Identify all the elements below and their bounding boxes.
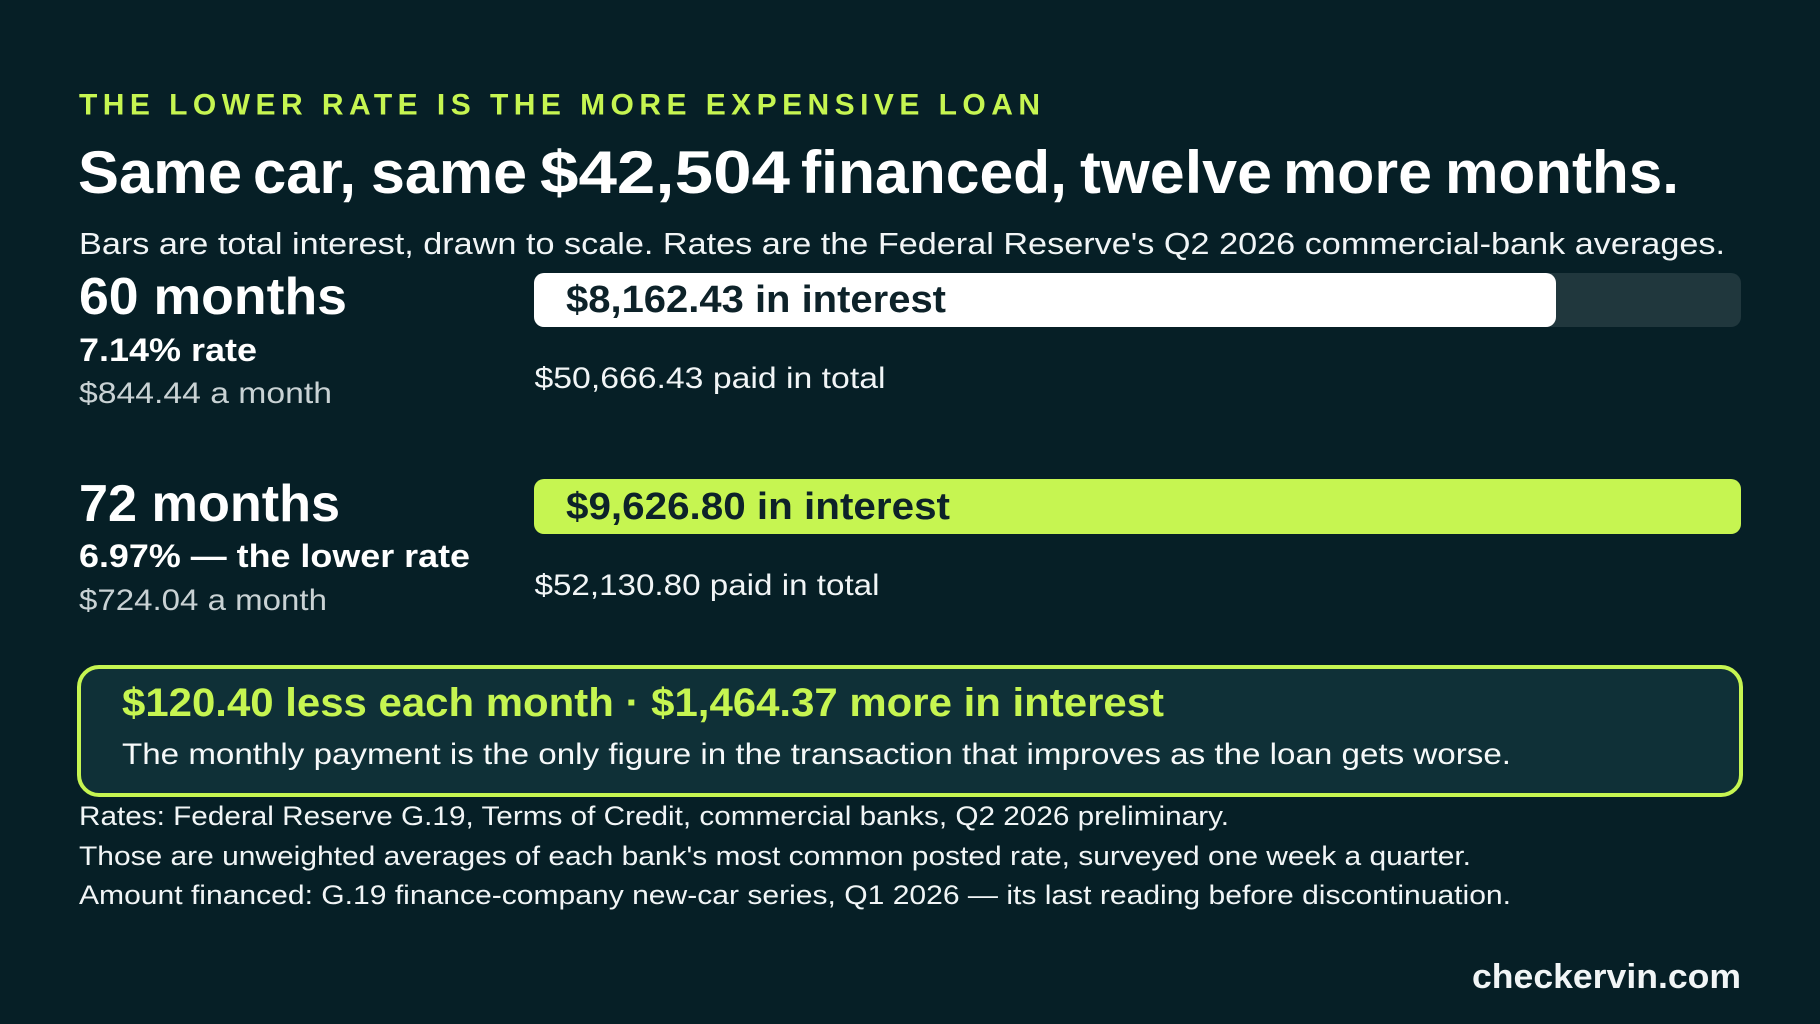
source note: amount financed: Amount financed: G.19 finance-company new-car series, Q1 2026 — its last reading before discontinuation.	[79, 880, 1511, 910]
title: same	[371, 139, 527, 206]
total paid: $50,666.43: $50,666.43 paid in total	[534, 362, 886, 395]
title	[78, 139, 1679, 206]
bar: 72 month interest	[534, 479, 1741, 534]
title: $42,504	[540, 139, 791, 206]
footnotes	[79, 801, 1511, 910]
title: more	[1283, 139, 1432, 206]
title: car,	[253, 139, 356, 206]
panel: 72 month loan row	[79, 475, 1741, 617]
callout body: The monthly payment is the only figure in the transaction that improves as the loan gets worse.	[122, 738, 1511, 771]
monthly payment: $724.04: $724.04 a month	[79, 584, 327, 617]
subtitle: Bars are total interest, drawn to scale. Rates are the Federal Reserve's Q2 2026 commercial-bank averages.	[79, 226, 1725, 261]
bar value: $9,626.80 in interest: $9,626.80 in interest	[566, 486, 950, 528]
term label: 72 months: 72 months	[79, 475, 340, 533]
term label: 60 months: 60 months	[79, 268, 347, 326]
panel: 60 month loan row	[79, 268, 1741, 410]
source note: rates: Rates: Federal Reserve G.19, Terms of Credit, commercial banks, Q2 2026 preliminary.	[79, 801, 1229, 831]
rate: 6.97%: 6.97% — the lower rate	[79, 538, 470, 574]
bar: 60 month interest	[534, 273, 1556, 327]
title: Same	[78, 139, 242, 206]
title: twelve	[1080, 139, 1272, 206]
monthly payment: $844.44: $844.44 a month	[79, 377, 332, 410]
brand: checkervin.com: checkervin.com	[1472, 958, 1741, 996]
rate: 7.14%: 7.14% rate	[79, 332, 257, 368]
total paid: $52,130.80: $52,130.80 paid in total	[534, 569, 880, 602]
bar track	[534, 273, 1741, 327]
callout headline: $120.40 less each month · $1,464.37 more in interest	[122, 681, 1164, 725]
title: months.	[1445, 139, 1679, 206]
eyebrow heading: THE LOWER RATE IS THE MORE EXPENSIVE LOAN	[79, 88, 1040, 122]
callout	[79, 667, 1741, 795]
bar value: $8,162.43 in interest: $8,162.43 in interest	[566, 279, 946, 321]
title: financed,	[801, 139, 1067, 206]
source note: method: Those are unweighted averages of each bank's most common posted rate, surveyed one week a quarter.	[79, 841, 1471, 871]
callout box	[79, 667, 1741, 795]
